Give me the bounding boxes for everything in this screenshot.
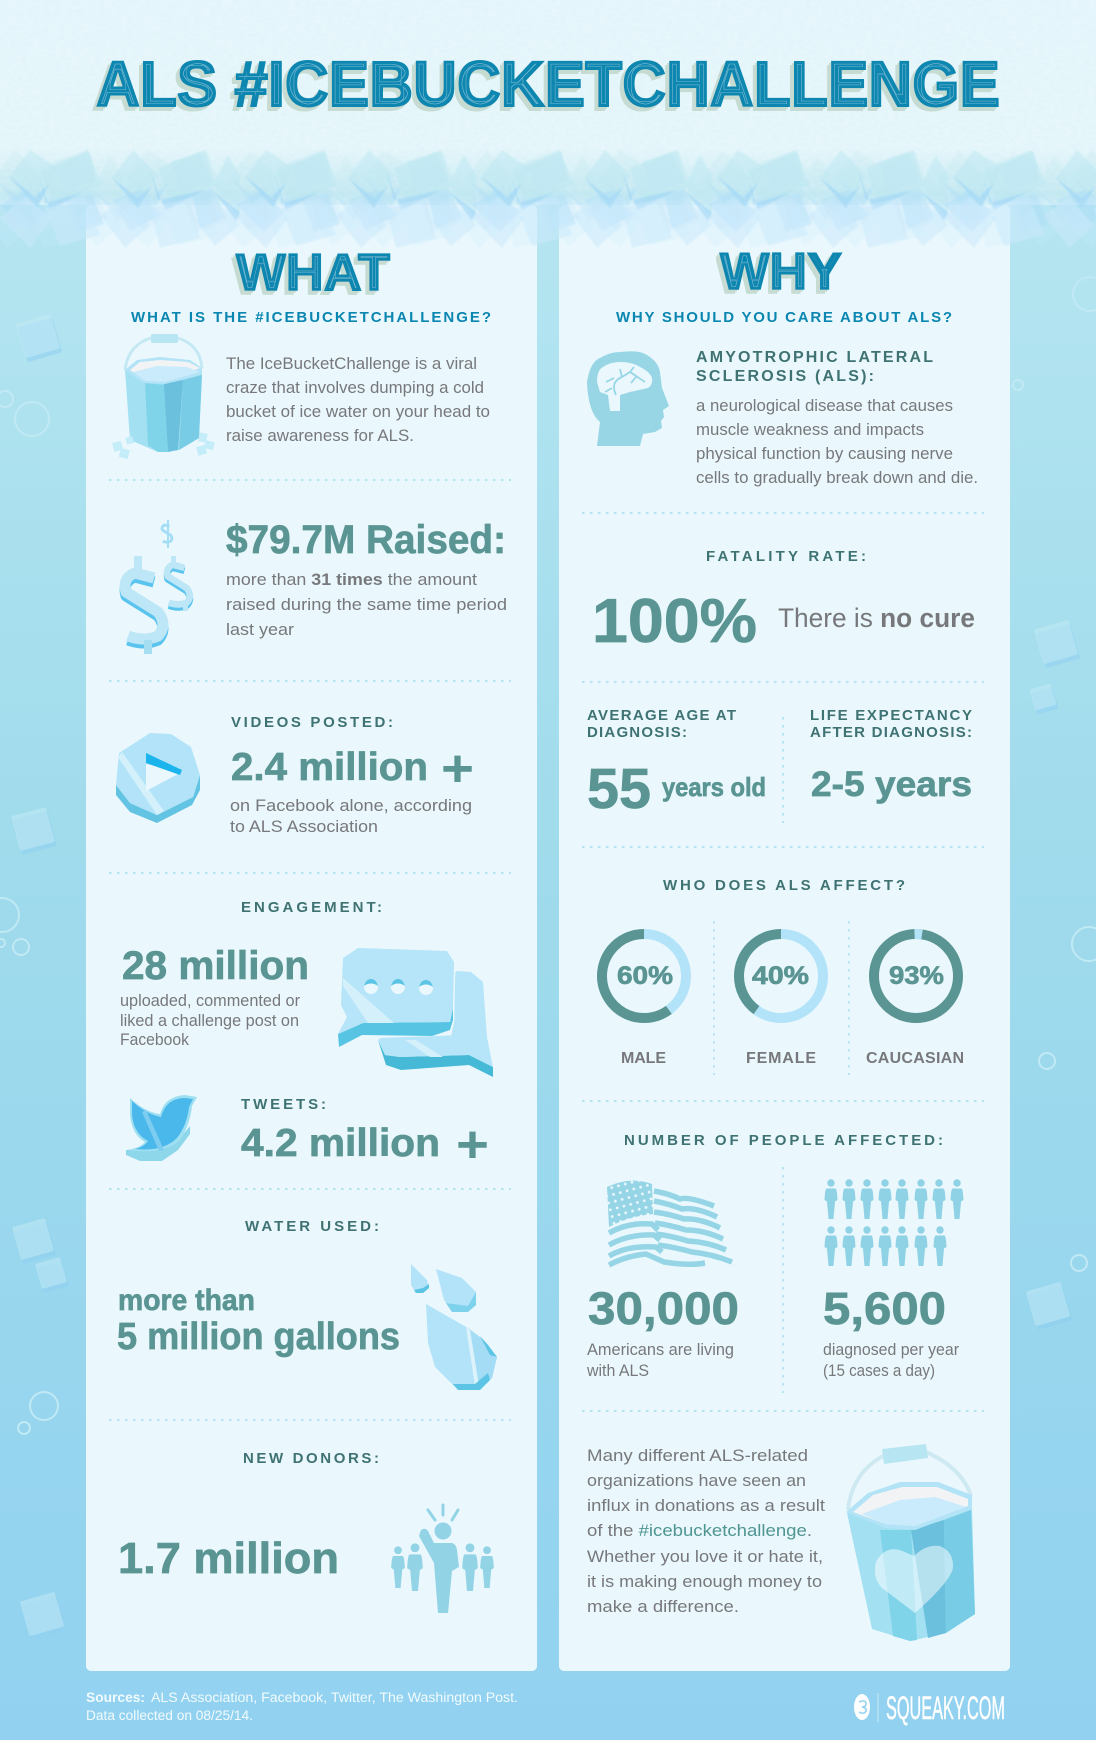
donut chart: male: 60% (617, 962, 673, 990)
stat: fatality rate (592, 587, 975, 656)
donut chart: female: 40% (752, 962, 809, 990)
stat: fatality rate: There is no cure (778, 603, 975, 633)
icon: american flag (607, 1181, 732, 1265)
stat: diagnosed per year: (15 cases a day) (823, 1361, 935, 1380)
icon: ice dollar signs (125, 520, 190, 654)
stat: americans living with als (586, 1283, 739, 1380)
heading: why: WHY (720, 243, 842, 301)
stat: videos posted: VIDEOS POSTED: (231, 714, 393, 731)
text: als definition: physical function by causing nerve (696, 444, 953, 463)
text: challenge description (226, 354, 490, 445)
donut chart: male (602, 934, 686, 1067)
text: closing paragraph: Whether you love it or hate it, (587, 1547, 823, 1566)
stat: videos posted: on Facebook alone, according (230, 796, 472, 815)
text: als definition: a neurological disease that causes (696, 396, 953, 415)
text: challenge description: craze that involves dumping a cold (226, 378, 484, 397)
stat: water used: more than (118, 1284, 255, 1317)
sources (86, 1690, 518, 1723)
icon: ice play button (116, 733, 200, 823)
stat: diagnosed per year: 5,600 (823, 1283, 946, 1334)
sources: ALS Association, Facebook, Twitter, The Washington Post. (151, 1690, 518, 1705)
text: challenge description: bucket of ice water on your head to (226, 402, 490, 421)
heading: what: WHAT (236, 244, 390, 302)
subheading: why care: WHY SHOULD YOU CARE ABOUT ALS? (616, 309, 952, 326)
stat: average age at diagnosis: years old (662, 772, 766, 802)
stat: videos posted: 2.4 million (231, 746, 428, 789)
icon: bucket with heart (846, 1444, 975, 1641)
icon: ice chat bubbles (338, 948, 493, 1077)
label: fatality rate: FATALITY RATE: (706, 548, 866, 565)
donut chart: female (739, 934, 823, 1067)
donut chart: male: MALE (621, 1050, 666, 1067)
donut chart: female: FEMALE (746, 1050, 816, 1067)
text: closing paragraph: of the #icebucketchallenge . (587, 1521, 812, 1540)
stat: life expectancy (810, 707, 972, 804)
stat: money raised: $79.7M Raised: (226, 518, 506, 562)
stat: facebook engagement (120, 944, 309, 1049)
sources: Data collected on 08/25/14. (86, 1708, 253, 1723)
donut chart: caucasian (866, 933, 964, 1067)
stat: money raised: more than 31 times the amount (226, 570, 477, 589)
stat: tweets: 4.2 million (241, 1122, 440, 1165)
subheading: what is the challenge: WHAT IS THE #ICEBUCKETCHALLENGE? (131, 309, 491, 326)
stat: tweets: + (456, 1116, 489, 1174)
label: new donors: NEW DONORS: (243, 1450, 379, 1467)
text: als definition: SCLEROSIS (ALS): (696, 368, 874, 385)
stat: videos posted: + (441, 740, 474, 798)
text: closing paragraph: it is making enough money to (587, 1572, 822, 1591)
stat: americans living with als: Americans are living (587, 1340, 734, 1359)
icon: people diagnosed per year (824, 1179, 964, 1266)
stat: water used: 5 million gallons (117, 1316, 400, 1358)
text: als definition (696, 349, 978, 487)
stat: water used (117, 1284, 400, 1358)
stat: facebook engagement: 28 million (122, 944, 309, 988)
text: als definition: muscle weakness and impacts (696, 420, 924, 439)
icon: bucket of ice water (112, 334, 215, 459)
stat: americans living with als: with ALS (586, 1361, 649, 1380)
donut chart: caucasian: 93% (889, 962, 944, 990)
label: number of people affected: NUMBER OF PEOPLE AFFECTED: (624, 1132, 943, 1149)
icon: ice water drops (411, 1264, 497, 1390)
text: closing paragraph: influx in donations as a result (587, 1496, 825, 1515)
label: engagement: ENGAGEMENT: (241, 899, 382, 916)
label: water used: WATER USED: (245, 1218, 379, 1235)
panel: what (86, 205, 537, 1671)
stat: videos posted (230, 714, 474, 836)
stat: tweets (241, 1096, 489, 1174)
stat: life expectancy: AFTER DIAGNOSIS: (810, 724, 972, 741)
stat: average age at diagnosis (587, 707, 766, 821)
sources: Sources: (86, 1690, 145, 1705)
stat: money raised: raised during the same time period (226, 595, 507, 614)
label: who does als affect: WHO DOES ALS AFFECT? (663, 877, 905, 894)
text: challenge description: raise awareness for ALS. (226, 426, 414, 445)
stat: life expectancy: 2-5 years (811, 765, 972, 804)
panel: why (559, 205, 1010, 1671)
icon: head with brain (587, 351, 669, 446)
stat: facebook engagement: uploaded, commented or (120, 991, 300, 1010)
text: closing paragraph (587, 1446, 825, 1616)
text: closing paragraph: organizations have seen an (587, 1471, 806, 1490)
floating ice cubes and bubbles (0, 277, 1096, 1640)
stat: facebook engagement: Facebook (120, 1030, 189, 1049)
stat: videos posted: to ALS Association (230, 817, 378, 836)
title: ALS #ICEBUCKETCHALLENGE (96, 48, 1000, 120)
stat: diagnosed per year (823, 1283, 959, 1380)
decorative ice cube fringe (0, 150, 1096, 248)
stat: average age at diagnosis: AVERAGE AGE AT (587, 707, 736, 724)
stat: americans living with als: 30,000 (588, 1283, 739, 1334)
text: challenge description: The IceBucketChallenge is a viral (226, 354, 477, 373)
stat: fatality rate: 100% (592, 587, 757, 656)
logo: squeaky.com (854, 1690, 1005, 1726)
icon: new donor group (391, 1505, 494, 1613)
stat: tweets: TWEETS: (241, 1096, 326, 1113)
text: closing paragraph: Many different ALS-related (587, 1446, 808, 1465)
stat: money raised (226, 518, 507, 639)
text: als definition: AMYOTROPHIC LATERAL (696, 349, 933, 366)
stat: new donors: 1.7 million (118, 1534, 339, 1583)
stat: average age at diagnosis: 55 (587, 757, 651, 821)
stat: diagnosed per year: diagnosed per year (823, 1340, 959, 1359)
stat: life expectancy: LIFE EXPECTANCY (810, 707, 972, 724)
text: als definition: cells to gradually break down and die. (696, 468, 978, 487)
stat: average age at diagnosis: DIAGNOSIS: (587, 724, 687, 741)
stat: facebook engagement: liked a challenge post on (120, 1011, 299, 1030)
stat: money raised: last year (226, 620, 294, 639)
donut chart: caucasian: CAUCASIAN (866, 1050, 964, 1067)
icon: ice twitter bird (126, 1095, 197, 1161)
text: closing paragraph: make a difference. (587, 1597, 739, 1616)
